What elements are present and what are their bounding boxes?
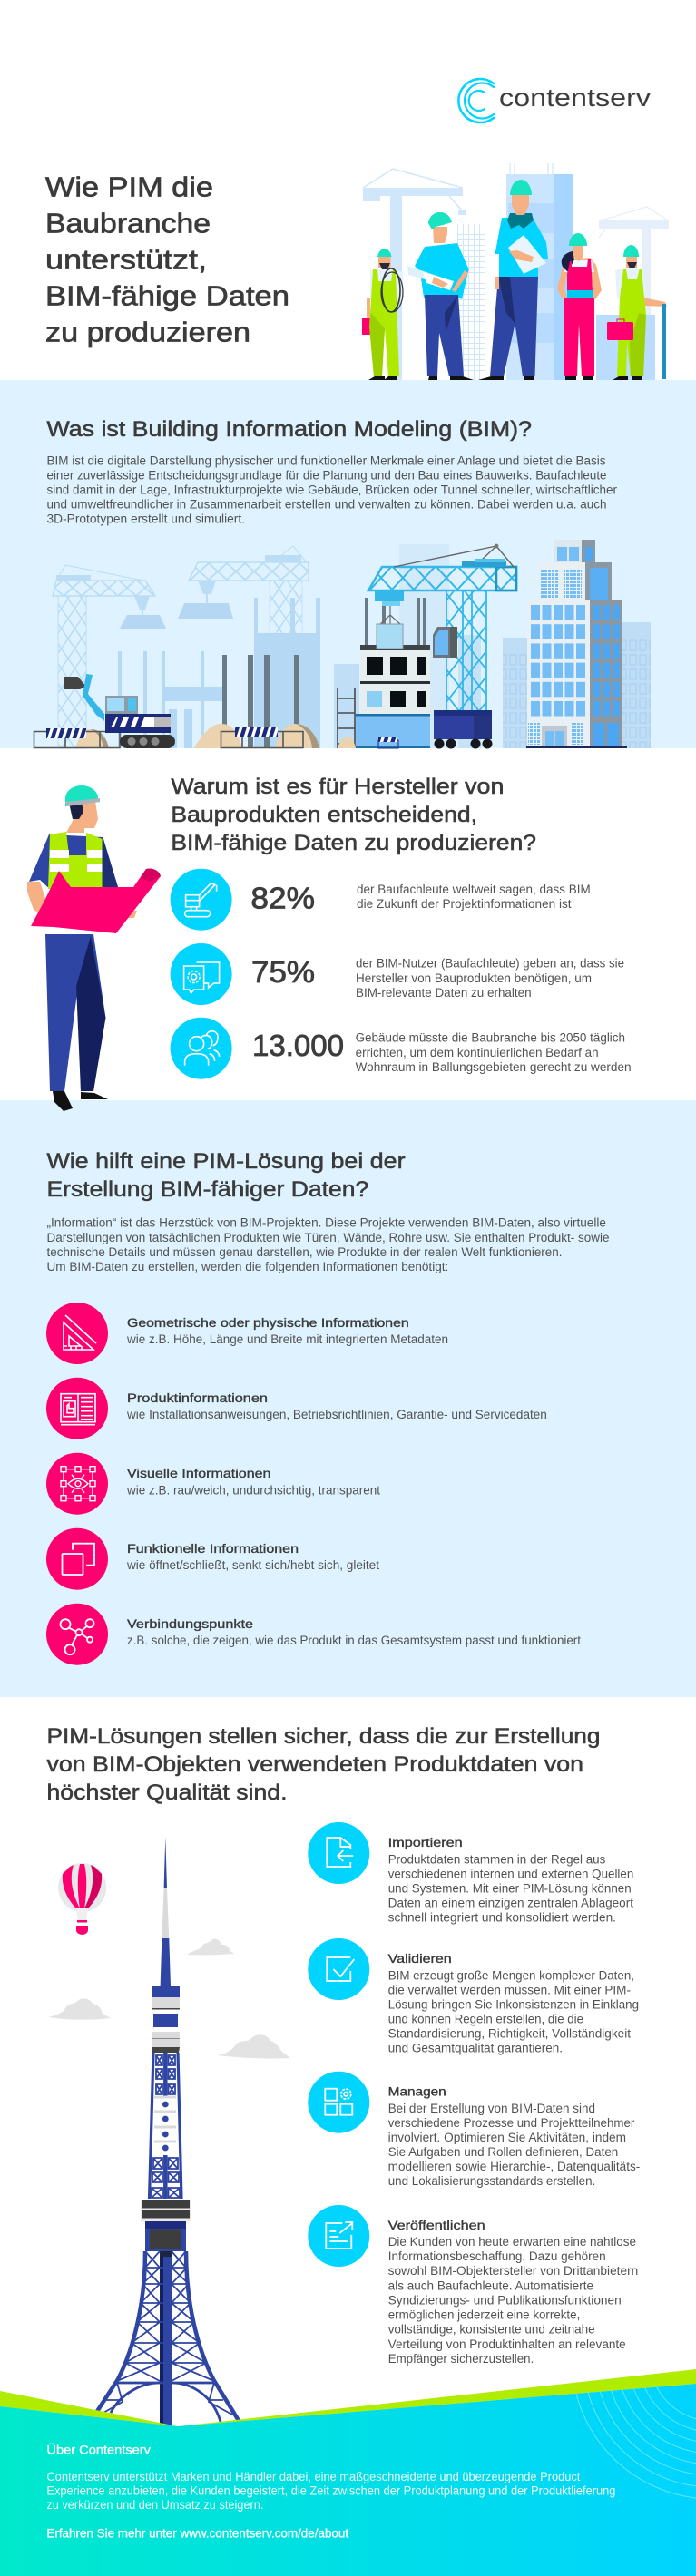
step: Managen: involviert. Optimieren Sie Aktivitäten, indem bbox=[388, 2131, 626, 2144]
illustration: pale background cranes and buildings bbox=[53, 544, 651, 748]
item: product information bbox=[46, 1378, 547, 1439]
stat: 75%: BIM-relevante Daten zu erhalten bbox=[356, 986, 532, 1000]
illustration: hot air balloon bbox=[58, 1863, 106, 1935]
item: functional information: wie öffnet/schließt, senkt sich/hebt sich, gleitet bbox=[126, 1558, 379, 1572]
step: Veröffentlichen: Informationsbeschaffung. Dazu gehören bbox=[388, 2249, 606, 2263]
panel: PIM solution section background bbox=[0, 1100, 696, 1697]
item: product information: wie Installationsanweisungen, Betriebsrichtlinien, Garantie- und Servicedaten bbox=[126, 1408, 547, 1421]
step: Importieren: und Systemen. Mit einer PIM-Lösung können bbox=[388, 1882, 632, 1896]
text block: about Contentserv: Contentserv unterstützt Marken und Händler dabei, eine maßgeschneiderte und überzeugende Product bbox=[46, 2470, 581, 2483]
item: geometric information bbox=[46, 1303, 448, 1364]
title: unterstützt, bbox=[45, 244, 207, 276]
item: visual information: Visuelle Informationen bbox=[127, 1467, 270, 1480]
step: Validieren: Lösung bringen Sie Inkonsistenzen in Einklang bbox=[388, 1997, 639, 2012]
illustration: excavator bbox=[64, 674, 175, 748]
heading: why manufacturers bbox=[171, 775, 536, 855]
stat: 75%: der BIM-Nutzer (Baufachleute) geben an, dass sie bbox=[356, 957, 624, 971]
text block: information intro: „Information“ ist das Herzstück von BIM-Projekten. Diese Projekte verwenden BIM-Daten, also virtuelle bbox=[47, 1216, 606, 1230]
illustration: grey columns and sand piles bbox=[75, 655, 319, 748]
illustration: building under construction bbox=[338, 598, 430, 748]
icon: manual book bbox=[46, 1378, 108, 1439]
item: geometric information: wie z.B. Höhe, Länge und Breite mit integrierten Metadaten bbox=[126, 1332, 448, 1346]
heading: how PIM helps bbox=[47, 1149, 405, 1202]
heading: why manufacturers: BIM-fähige Daten zu produzieren? bbox=[171, 831, 536, 855]
stat: 75% bbox=[171, 943, 624, 1005]
step: Veröffentlichen: als auch Baufachleute. Automatisierte bbox=[388, 2278, 593, 2293]
icon: checkbox bbox=[308, 1938, 369, 2000]
step: Validieren: und können Regeln erstellen, die die bbox=[388, 2012, 583, 2026]
step: Veröffentlichen: vollständige, konsistente und zeitnahe bbox=[388, 2323, 595, 2337]
item: visual information bbox=[46, 1453, 380, 1515]
step: Managen: Bei der Erstellung von BIM-Daten sind bbox=[388, 2102, 595, 2115]
step: Managen: modellieren sowie Hierarchie-, Datenqualitäts- bbox=[388, 2160, 640, 2173]
step: Veröffentlichen: Empfänger sicherzustellen. bbox=[388, 2352, 534, 2366]
hero illustration: female worker bbox=[557, 233, 602, 380]
hero illustration: tall foreman bbox=[478, 180, 548, 380]
title bbox=[45, 171, 289, 348]
step: Veröffentlichen: ermöglichen jederzeit eine korrekte, bbox=[388, 2308, 580, 2322]
icon: file import bbox=[308, 1822, 369, 1884]
step: Importieren: verschiedenen internen und externen Quellen bbox=[388, 1867, 633, 1880]
stat: 13.000: 13.000 bbox=[252, 1029, 344, 1062]
stat: 82% bbox=[171, 869, 591, 931]
icon: gear speech bubbles bbox=[171, 943, 232, 1005]
text block: BIM definition: und umweltfreundlicher in Zusammenarbeit erstellen und verwalten zu können. Dabei werden u.a. auch bbox=[47, 497, 606, 511]
icon: connected nodes bbox=[46, 1604, 108, 1665]
heading: PIM ensures data quality: höchster Qualität sind. bbox=[47, 1781, 287, 1805]
heading: PIM ensures data quality bbox=[47, 1724, 601, 1805]
title: Wie PIM die bbox=[45, 171, 213, 203]
step: Validieren: BIM erzeugt große Mengen komplexer Daten, bbox=[388, 1968, 634, 1982]
text block: information intro: Um BIM-Daten zu erstellen, werden die folgenden Informationen benötigt: bbox=[47, 1260, 448, 1273]
panel: BIM section background bbox=[0, 380, 696, 748]
illustration: cyan tower crane bbox=[368, 544, 516, 749]
tower spire bbox=[161, 1837, 171, 1986]
logo: contentserv bbox=[458, 79, 651, 122]
stat: 75%: Hersteller von Bauprodukten benötigen, um bbox=[356, 971, 592, 985]
tower lower legs and lattice bbox=[96, 2251, 240, 2431]
heading: why manufacturers: Bauprodukten entscheidend, bbox=[171, 803, 477, 827]
step: Veröffentlichen: Syndizierungs- und Publikationsfunktionen bbox=[388, 2293, 622, 2308]
step: Validieren: Standardisierung, Richtigkeit, Vollständigkeit bbox=[388, 2027, 631, 2041]
step: Importieren: schnell integriert und konsolidiert werden. bbox=[388, 1911, 616, 1925]
step: Managen: Sie Aufgaben und Rollen definieren, Daten bbox=[388, 2145, 618, 2159]
item: geometric information: Geometrische oder physische Informationen bbox=[127, 1316, 409, 1330]
text block: BIM definition bbox=[47, 454, 618, 526]
tower upper lattice bbox=[149, 2053, 181, 2199]
step: Validieren bbox=[308, 1938, 639, 2055]
text block: about Contentserv: zu verkürzen und den Umsatz zu steigern. bbox=[46, 2498, 263, 2512]
icon: publish document bbox=[308, 2205, 369, 2267]
hero illustration: background construction site bbox=[363, 163, 669, 381]
step: Importieren: Produktdaten stammen in der Regel aus bbox=[388, 1852, 606, 1866]
item: visual information: wie z.B. rau/weich, undurchsichtig, transparent bbox=[126, 1483, 380, 1497]
step: Managen bbox=[308, 2072, 640, 2188]
step: Importieren: Daten an einem einzigen zentralen Ablageort bbox=[388, 1897, 633, 1910]
step: Validieren: die verwaltet werden müssen. Mit einer PIM- bbox=[388, 1983, 631, 1996]
title: BIM-fähige Daten bbox=[45, 280, 289, 312]
text block: information intro: technische Details und müssen genau darstellen, wie Produkte in der realen Welt funktionieren. bbox=[47, 1245, 563, 1259]
item: connection points: z.B. solche, die zeigen, wie das Produkt in das Gesamtsystem passt und funktioniert bbox=[127, 1634, 581, 1647]
heading: PIM ensures data quality: PIM-Lösungen stellen sicher, dass die zur Erstellung bbox=[47, 1724, 601, 1749]
stat: 13.000: errichten, um dem kontinuierlichen Bedarf an bbox=[356, 1046, 599, 1059]
text block: BIM definition: einer zuverlässige Entscheidungsgrundlage für die Planung und den Bau eines Bauwerks. Baufachleute bbox=[47, 468, 606, 482]
stat: 13.000: Wohnraum in Ballungsgebieten gerecht zu werden bbox=[356, 1060, 632, 1074]
step: Managen: verschiedene Prozesse und Projektteilnehmer bbox=[388, 2116, 635, 2130]
icon: concentric C logo mark bbox=[458, 79, 494, 122]
stat: 82%: 82% bbox=[250, 882, 315, 915]
step: Veröffentlichen: Die Kunden von heute erwarten eine nahtlose bbox=[388, 2235, 636, 2249]
text block: BIM definition: 3D-Prototypen erstellt und simuliert. bbox=[47, 512, 245, 526]
icon: overlapping pages bbox=[46, 1528, 108, 1590]
illustration: broadcast tower bbox=[96, 1837, 240, 2431]
title: zu produzieren bbox=[45, 317, 250, 348]
step: Importieren: Importieren bbox=[388, 1836, 463, 1849]
logo: contentserv: contentserv bbox=[499, 83, 651, 112]
step: Veröffentlichen: Veröffentlichen bbox=[388, 2219, 485, 2232]
step: Veröffentlichen bbox=[308, 2205, 638, 2366]
step: Importieren bbox=[308, 1822, 633, 1925]
text block: BIM definition: BIM ist die digitale Darstellung physischer und funktioneller Merkmale einer Anlage und bietet die Basis bbox=[47, 454, 606, 467]
text block: about Contentserv: Über Contentserv bbox=[46, 2442, 151, 2457]
item: functional information: Funktionelle Informationen bbox=[127, 1542, 299, 1556]
step: Managen: und Lokalisierungsstandards erstellen. bbox=[388, 2174, 595, 2188]
text block: about Contentserv: Experience anzubieten, die Kunden begeistert, die Zeit zwischen der Produktplanung und der Produktlieferung bbox=[46, 2483, 615, 2497]
item: functional information bbox=[46, 1528, 379, 1590]
hero illustration: worker with cable bbox=[362, 249, 404, 380]
illustration: office tower bbox=[526, 540, 627, 748]
item: product information: Produktinformationen bbox=[127, 1391, 268, 1405]
stat: 13.000: Gebäude müsste die Baubranche bis 2050 täglich bbox=[356, 1031, 625, 1045]
heading: PIM ensures data quality: von BIM-Objekten verwendeten Produktdaten von bbox=[47, 1752, 583, 1777]
heading: why manufacturers: Warum ist es für Hersteller von bbox=[171, 775, 504, 799]
hero illustration: worker with plans bbox=[407, 212, 474, 380]
heading: how PIM helps: Erstellung BIM-fähiger Daten? bbox=[47, 1177, 368, 1202]
stat: 82%: der Baufachleute weltweit sagen, dass BIM bbox=[357, 883, 591, 896]
step: Managen: Managen bbox=[388, 2085, 446, 2099]
text block: information intro: Darstellungen von tatsächlichen Produkten wie Türen, Wände, Rohre usw. Sie enthalten Produkt- sowie bbox=[47, 1231, 610, 1244]
tower upper platforms bbox=[152, 1986, 180, 2053]
stat: 82%: die Zukunft der Projektinformationen ist bbox=[357, 897, 572, 911]
illustration: man's left foot over panel bbox=[53, 1091, 73, 1111]
illustration: barriers bbox=[34, 727, 303, 748]
panel: footer with gradient bbox=[0, 2369, 696, 2576]
icon: grid with gear bbox=[308, 2072, 369, 2133]
text block: BIM definition: sind damit in der Lage, Infrastrukturprojekte wie Gebäude, Brücken oder Tunnel schneller, wirtschaftlicher bbox=[47, 483, 618, 496]
stat: 13.000 bbox=[171, 1018, 632, 1079]
item: connection points bbox=[46, 1604, 581, 1665]
icon: group of people bbox=[171, 1018, 232, 1079]
stat: 75%: 75% bbox=[251, 955, 315, 989]
text block: information intro bbox=[47, 1216, 610, 1273]
icon: crane bbox=[171, 869, 232, 931]
tower observation deck bbox=[141, 2200, 191, 2251]
icon: eye with nodes bbox=[46, 1453, 108, 1515]
hero illustration: worker with toolbox bbox=[607, 245, 667, 380]
icon: set square and ruler bbox=[46, 1303, 108, 1364]
heading: how PIM helps: Wie hilft eine PIM-Lösung bei der bbox=[47, 1149, 405, 1174]
step: Veröffentlichen: Verteilung von Produktinhalten an relevante bbox=[388, 2337, 626, 2351]
text block: about Contentserv bbox=[46, 2442, 615, 2540]
item: connection points: Verbindungspunkte bbox=[127, 1617, 253, 1631]
step: Validieren: Validieren bbox=[388, 1952, 452, 1966]
illustration: clouds bbox=[48, 1939, 290, 2059]
step: Veröffentlichen: sowohl BIM-Objektersteller von Drittanbietern bbox=[388, 2264, 638, 2278]
heading: Was ist BIM: Was ist Building Information Modeling (BIM)? bbox=[47, 417, 532, 442]
text block: about Contentserv: Erfahren Sie mehr unter www.contentserv.com/de/about bbox=[46, 2525, 348, 2540]
step: Validieren: und Gesamtqualität garantieren. bbox=[388, 2042, 563, 2055]
title: Baubranche bbox=[45, 208, 211, 239]
illustration: man reading blueprint bbox=[27, 785, 161, 1099]
